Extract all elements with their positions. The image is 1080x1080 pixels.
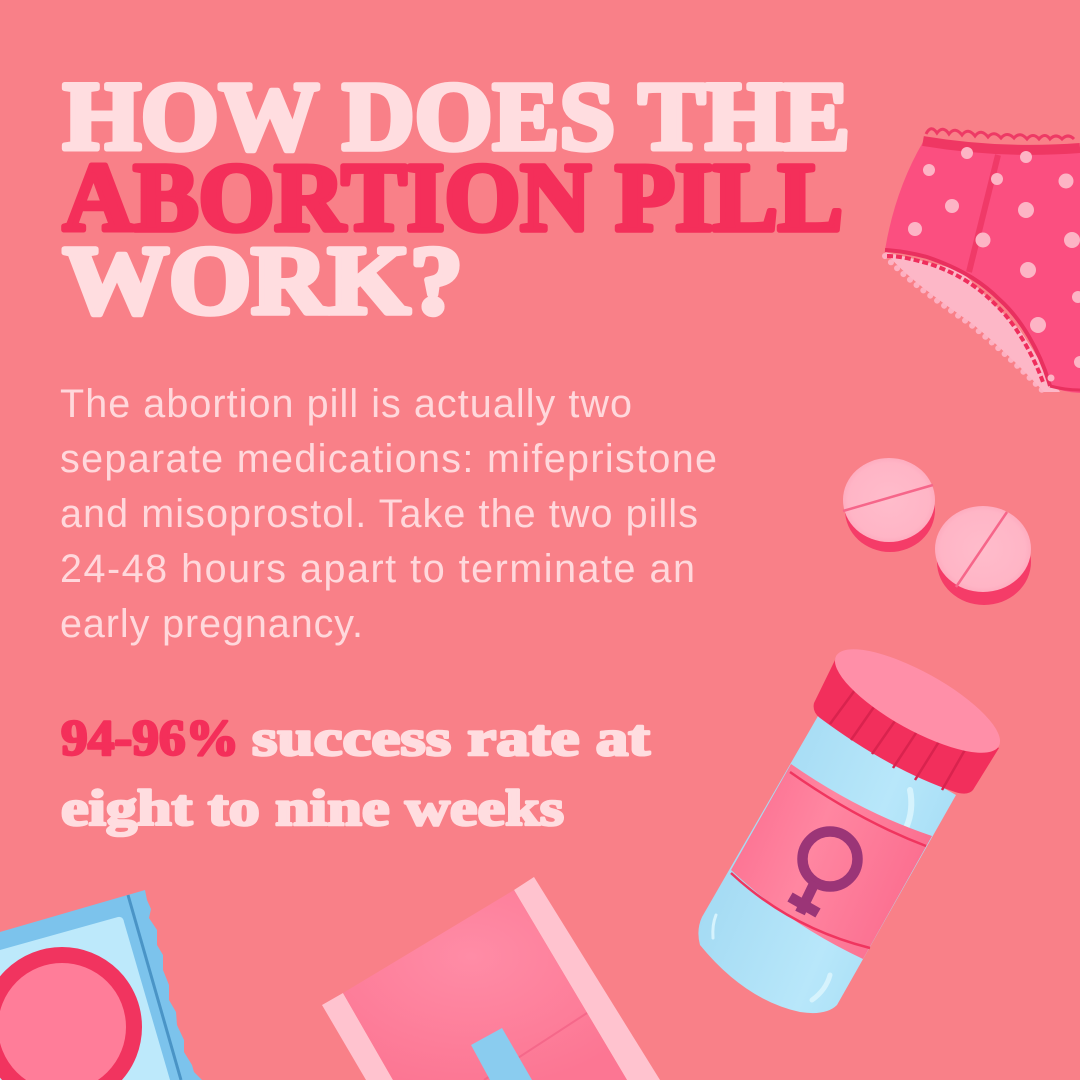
icon: sanitary pad [322, 877, 660, 1080]
title [63, 63, 850, 334]
body text: and misoprostol. Take the two pills [60, 492, 698, 536]
success rate callout: eight to nine weeks [61, 781, 564, 837]
body text [60, 382, 717, 646]
icon: condom packet [0, 890, 202, 1080]
bottle cap [814, 658, 999, 794]
bottle body [698, 716, 956, 1013]
icon: pill bottle [698, 631, 1013, 1013]
pill right [935, 506, 1031, 605]
icon: underwear [885, 129, 1080, 393]
venus symbol [790, 832, 858, 913]
success rate callout [61, 711, 650, 837]
icon: pills [843, 458, 1031, 605]
body text: The abortion pill is actually two [60, 382, 632, 426]
title: WORK? [63, 227, 463, 334]
pill left [843, 458, 935, 552]
body text: separate medications: mifepristone [60, 437, 717, 481]
body text: early pregnancy. [60, 602, 363, 646]
label [731, 764, 932, 959]
title: ABORTION PILL [63, 144, 843, 251]
success rate callout: success rate at [252, 711, 650, 767]
body text: 24-48 hours apart to terminate an [60, 547, 695, 591]
title: HOW DOES THE [63, 63, 850, 170]
success rate callout: 94-96% [61, 711, 239, 767]
